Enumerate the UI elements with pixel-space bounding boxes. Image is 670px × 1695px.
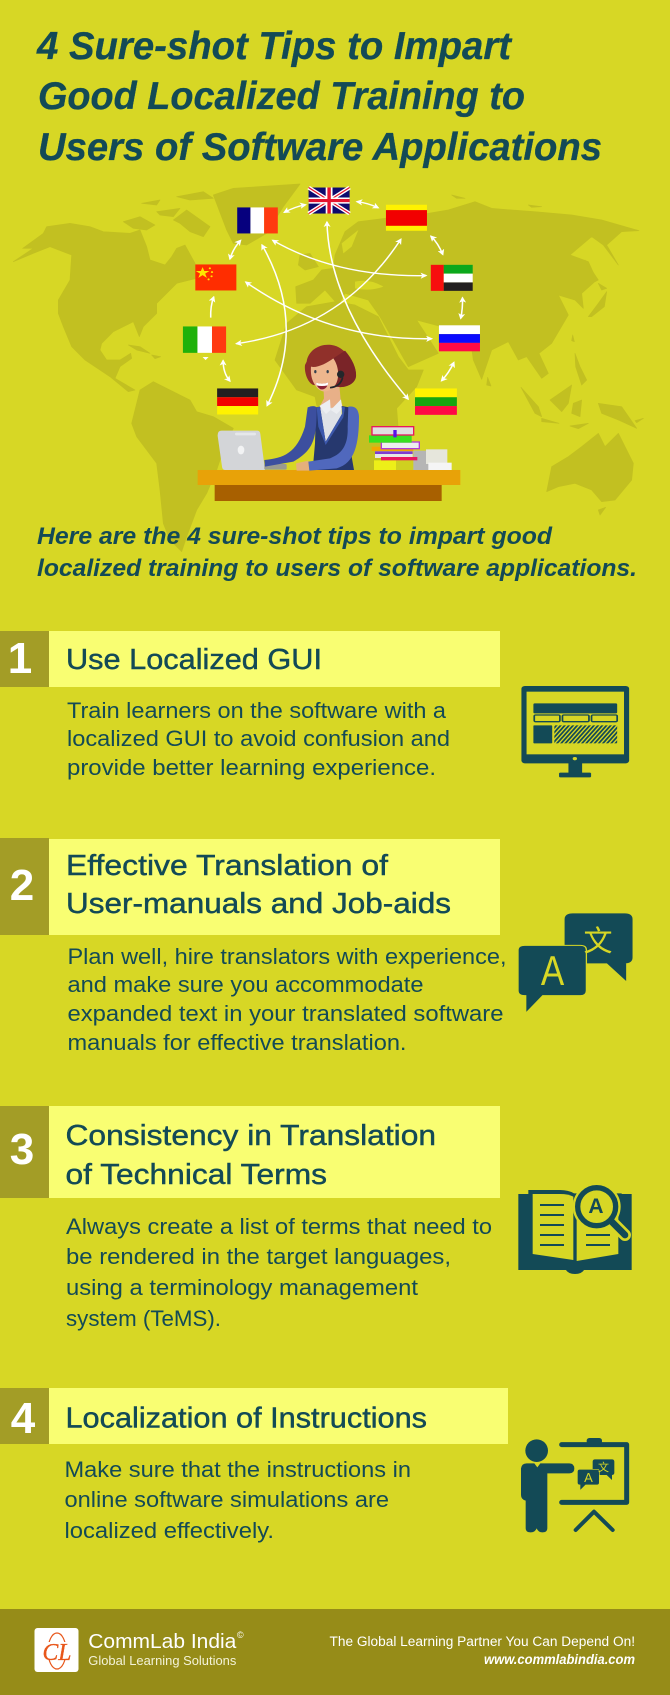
flag: Italy <box>183 326 226 353</box>
icon: book with magnifier: A <box>588 1195 604 1218</box>
tip 1 panel <box>0 631 629 780</box>
tip 3 panel <box>0 1106 632 1331</box>
icon: translation speech bubbles <box>518 913 633 1013</box>
flag: Germany <box>217 388 258 414</box>
icon: presenter at board: 文 <box>598 1460 609 1474</box>
footer band <box>0 1609 670 1695</box>
hero illustration: world map with flags and trainer <box>13 184 643 552</box>
body text 1 <box>67 698 450 780</box>
body text 3: system (TeMS). <box>66 1306 221 1331</box>
flag: China <box>195 264 236 290</box>
number badge 4: 4 <box>11 1394 36 1443</box>
laptop <box>218 431 287 470</box>
number badge 2 <box>0 838 49 935</box>
number badge 1: 1 <box>8 634 32 683</box>
tip 4 panel <box>0 1388 627 1543</box>
title: Users of Software Applications <box>38 126 602 169</box>
heading band 2: User-manuals and Job-aids <box>66 888 451 920</box>
heading band 3: of Technical Terms <box>66 1159 327 1191</box>
number badge 4 <box>0 1388 49 1444</box>
logo: CommLab India: © <box>237 1630 244 1640</box>
intro text: localized training to users of software applications. <box>37 555 637 582</box>
heading band 1: Use Localized GUI <box>66 644 322 676</box>
body text 2: expanded text in your translated software <box>68 1001 504 1026</box>
heading band 1 <box>49 631 500 687</box>
body text 1: localized GUI to avoid confusion and <box>67 726 450 751</box>
body text 4: online software simulations are <box>64 1487 389 1512</box>
icon: translation speech bubbles: 文 <box>583 925 613 958</box>
heading band 4: Localization of Instructions <box>66 1402 427 1434</box>
flag: UAE <box>431 265 473 291</box>
title <box>36 25 602 169</box>
logo: CommLab India <box>34 1628 244 1672</box>
body text 4: localized effectively. <box>64 1518 274 1543</box>
flag connection arrows <box>203 202 463 406</box>
body text 2 <box>68 944 506 1055</box>
body text 4 <box>64 1457 411 1543</box>
flag: Lithuania <box>415 388 457 415</box>
heading band 2 <box>49 839 500 935</box>
title: 4 Sure-shot Tips to Impart <box>36 25 513 68</box>
body text 2: and make sure you accommodate <box>68 972 424 997</box>
body text 2: manuals for effective translation. <box>68 1030 407 1055</box>
intro text: Here are the 4 sure-shot tips to impart good <box>37 523 553 550</box>
number badge 3 <box>0 1106 49 1198</box>
body text 3: be rendered in the target languages, <box>66 1244 451 1269</box>
logo: CommLab India: CommLab India <box>88 1631 237 1653</box>
title: Good Localized Training to <box>38 75 525 118</box>
body text 2: Plan well, hire translators with experience, <box>68 944 506 969</box>
body text 3: using a terminology management <box>66 1275 419 1300</box>
number badge 1 <box>0 631 49 687</box>
flag: France <box>237 207 278 233</box>
body text 1: Train learners on the software with a <box>67 698 447 723</box>
heading band 2: Effective Translation of <box>66 850 389 882</box>
heading band 4 <box>49 1388 508 1444</box>
logo: CommLab India: CL <box>42 1640 72 1666</box>
flag: UK <box>309 188 350 214</box>
icon: monitor <box>521 686 629 777</box>
icon: presenter at board: A <box>584 1470 593 1485</box>
icon: book with magnifier <box>518 1183 632 1274</box>
trainer at desk <box>198 345 460 501</box>
footer tagline and url <box>330 1634 635 1667</box>
book stack <box>369 427 452 470</box>
body text 1: provide better learning experience. <box>67 755 436 780</box>
icon: translation speech bubbles: A <box>541 948 564 995</box>
body text 3: Always create a list of terms that need to <box>66 1214 492 1239</box>
footer tagline and url: www.commlabindia.com <box>484 1652 635 1667</box>
body text 4: Make sure that the instructions in <box>64 1457 411 1482</box>
heading band 3: Consistency in Translation <box>66 1120 436 1152</box>
footer tagline and url: The Global Learning Partner You Can Depend On! <box>330 1634 635 1649</box>
flags <box>183 188 480 415</box>
logo: CommLab India: Global Learning Solutions <box>88 1654 236 1668</box>
world map <box>13 184 643 552</box>
tip 2 panel <box>0 838 633 1055</box>
woman with headset <box>264 345 359 471</box>
flag: Spain <box>386 205 427 231</box>
heading band 3 <box>49 1106 500 1198</box>
number badge 3: 3 <box>10 1125 34 1174</box>
number badge 2: 2 <box>10 861 34 910</box>
icon: presenter at board <box>521 1438 627 1532</box>
desk <box>198 470 460 501</box>
intro text <box>37 523 637 582</box>
flag: Russia <box>439 325 480 351</box>
body text 3 <box>66 1214 492 1331</box>
